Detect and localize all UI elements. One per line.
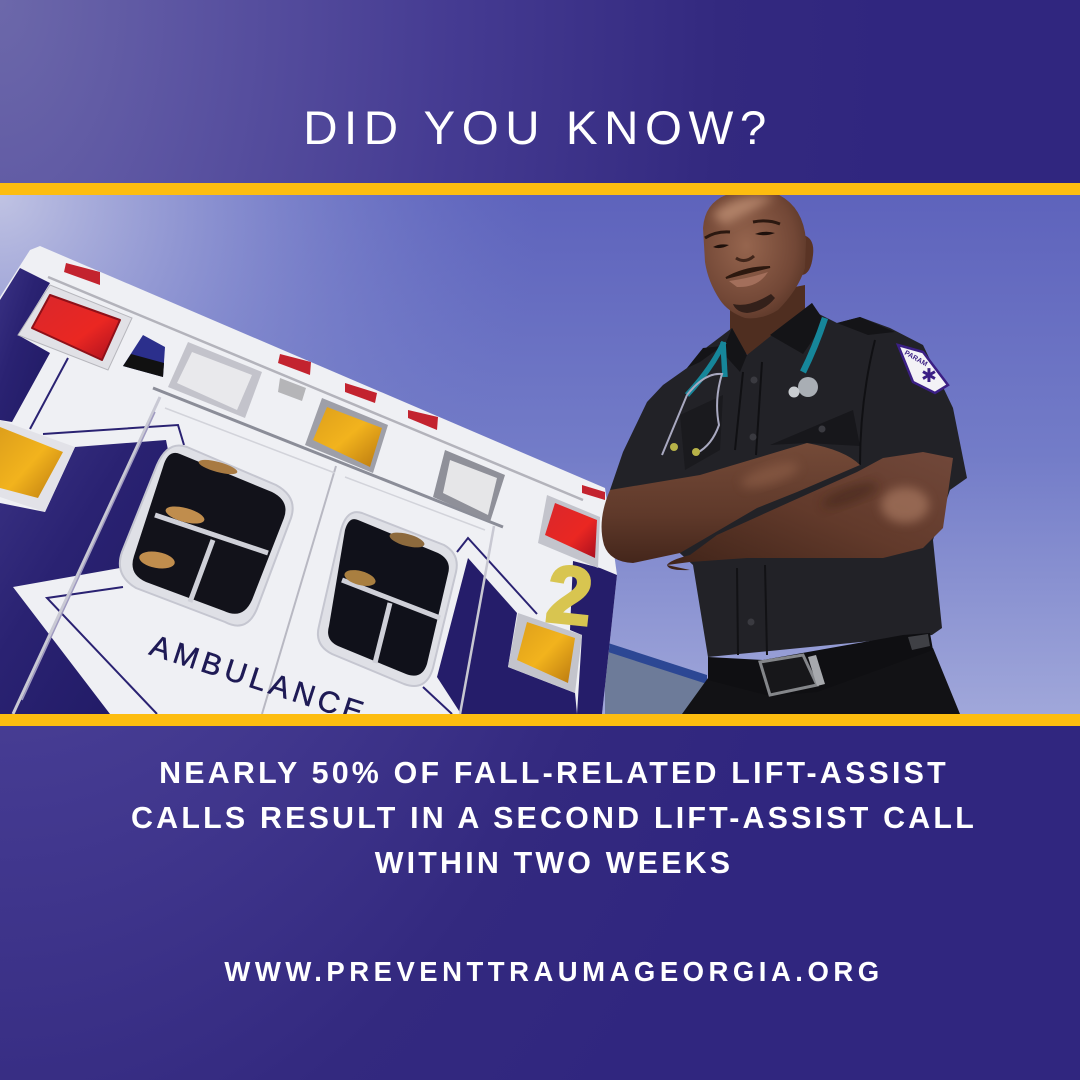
blue reflector <box>123 335 165 377</box>
amber light lower <box>508 613 582 693</box>
marker lights <box>64 263 605 500</box>
shirt <box>610 303 967 657</box>
clear light 2 <box>433 450 505 522</box>
building <box>605 642 707 714</box>
head <box>703 193 813 318</box>
main statistic text: WITHIN TWO WEEKS <box>375 846 733 880</box>
main statistic text <box>131 756 977 880</box>
main statistic text: CALLS RESULT IN A SECOND LIFT-ASSIST CALL <box>131 801 977 835</box>
window 1 <box>120 445 293 626</box>
sleeve patch: PARAM <box>903 350 928 368</box>
clear light 1 <box>168 342 262 418</box>
paramedic <box>602 193 967 714</box>
amber light upper <box>305 398 388 473</box>
stethoscope <box>662 318 825 456</box>
title: DID YOU KNOW? <box>303 102 773 155</box>
website url: WWW.PREVENTTRAUMAGEORGIA.ORG <box>224 956 884 987</box>
belt <box>708 633 933 696</box>
navy side panels <box>0 268 50 422</box>
red light right <box>538 495 600 568</box>
sleeve patch: ✱ <box>921 365 937 387</box>
sky <box>0 195 1080 714</box>
window 2 <box>318 512 457 686</box>
shirt details <box>680 303 895 655</box>
ambulance <box>0 246 617 731</box>
sleeve patch <box>898 345 948 393</box>
photo: paramedic and ambulance <box>0 183 1080 726</box>
neck <box>730 285 805 358</box>
amber light left <box>0 420 75 512</box>
main statistic text: NEARLY 50% OF FALL-RELATED LIFT-ASSIST <box>159 756 949 790</box>
red light left <box>18 285 132 370</box>
number 2: 2 <box>542 548 597 644</box>
top yellow bar <box>0 183 1080 195</box>
crossed arms <box>602 443 953 570</box>
navy pinstripes <box>30 358 537 714</box>
trousers <box>682 648 960 714</box>
rails and trim <box>13 277 583 714</box>
bottom yellow bar <box>0 714 1080 726</box>
